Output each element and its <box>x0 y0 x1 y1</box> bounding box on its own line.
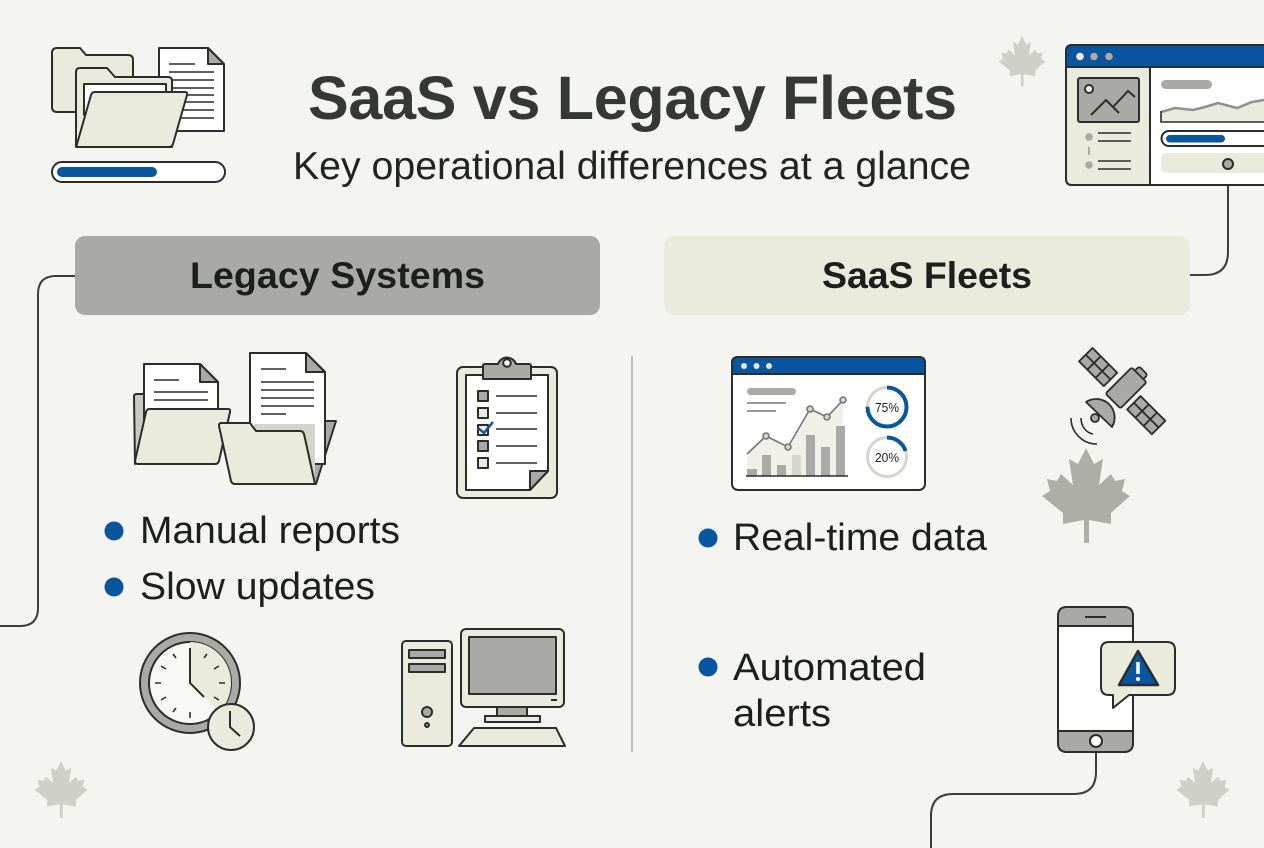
connector: legacy header to left edge <box>0 276 75 626</box>
icon: maple leaf bottom right <box>1177 761 1229 818</box>
connector: phone to bottom edge <box>931 752 1096 848</box>
panel header: Legacy Systems <box>75 236 600 315</box>
icon: folders and progress bar <box>52 48 225 182</box>
connector: SaaS header to browser window <box>1190 168 1228 275</box>
bullet: automated alerts <box>698 647 926 735</box>
bullet list: legacy drawbacks: Manual reports <box>140 510 400 552</box>
bullet: real-time data: Real-time data <box>733 517 988 559</box>
icon: phone with alert bubble <box>1058 607 1175 752</box>
icon: analytics dashboard <box>732 357 925 490</box>
title: SaaS vs Legacy Fleets <box>308 64 957 132</box>
panel header: Legacy Systems: Legacy Systems <box>190 254 485 296</box>
bullet: automated alerts: alerts <box>733 693 831 735</box>
icon: legacy folders with documents <box>134 353 336 484</box>
panel header: SaaS Fleets <box>664 236 1190 315</box>
panel header: SaaS Fleets: SaaS Fleets <box>822 254 1032 296</box>
icon: maple leaf top <box>999 36 1045 86</box>
icon: browser window <box>1066 45 1264 185</box>
bullet list: legacy drawbacks <box>104 510 400 608</box>
icon: analytics dashboard: 75% <box>875 400 899 415</box>
bullet: automated alerts: Automated <box>733 647 926 689</box>
icon: clock <box>140 633 254 750</box>
icon: maple leaf large <box>1042 448 1130 543</box>
icon: satellite <box>1071 334 1179 444</box>
icon: clipboard checklist <box>457 358 557 498</box>
subtitle: Key operational differences at a glance <box>293 145 971 188</box>
icon: maple leaf bottom left <box>35 761 87 818</box>
icon: analytics dashboard: 20% <box>875 450 899 465</box>
icon: desktop computer <box>402 629 565 746</box>
bullet list: legacy drawbacks: Slow updates <box>140 566 375 608</box>
